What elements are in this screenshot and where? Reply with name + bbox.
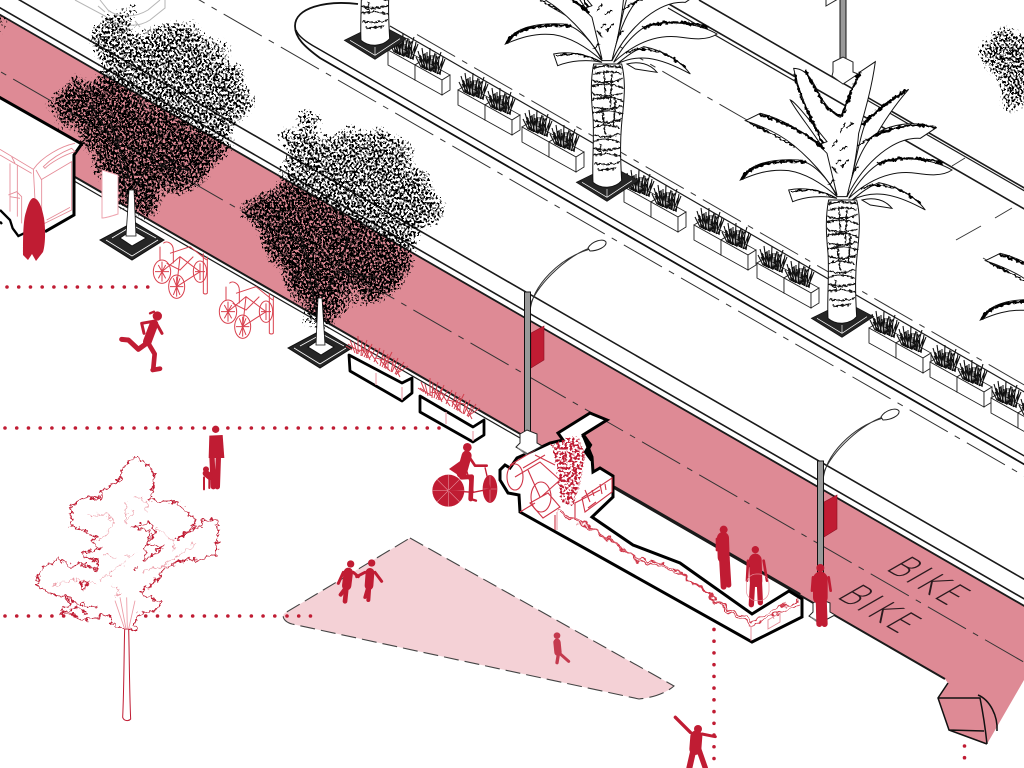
car [75, 0, 165, 27]
BIKE lane lettering: BIKE [826, 579, 932, 640]
red railing squiggle [558, 512, 800, 626]
roll-up end of lane [938, 683, 997, 744]
palm tree 4 [980, 202, 1024, 477]
street lamp 1 [516, 240, 606, 455]
BIKE lane lettering [826, 551, 981, 640]
red plant in block [552, 436, 586, 505]
palm tree 1 [273, 0, 485, 59]
bike rack 1 [153, 242, 207, 298]
runner [122, 311, 162, 370]
red bikes in block [507, 450, 612, 530]
palm tree 2 [505, 0, 717, 201]
bike rack 2 [219, 282, 273, 338]
street tree 2 [233, 107, 448, 368]
dotted leader lines [5, 287, 964, 768]
far light pole [826, 0, 858, 84]
street tree 1 [45, 0, 260, 260]
cyclist [432, 443, 497, 507]
person in cloak [23, 198, 45, 261]
person by lamp [812, 564, 831, 624]
pedestrians on plaza [717, 526, 769, 605]
person with dog [203, 426, 224, 489]
skater [675, 717, 715, 768]
street lamp 2 [809, 409, 899, 624]
white panel [102, 170, 118, 218]
BIKE lane lettering: BIKE [875, 551, 981, 612]
child [554, 632, 569, 663]
red outline tree [37, 457, 218, 721]
red planter 2 [418, 378, 484, 442]
distant tree foliage [970, 22, 1024, 110]
red planter 1 [346, 336, 412, 401]
plaza dots overlay [287, 614, 312, 618]
corner tree foliage [0, 4, 14, 44]
cut section block [500, 413, 802, 642]
palm tree 3 [740, 62, 952, 337]
light red triangular plaza [283, 538, 674, 699]
median curb [295, 3, 1024, 470]
planters on median [388, 33, 1024, 443]
couple walking [338, 559, 382, 601]
kiosk shelter [0, 97, 82, 236]
